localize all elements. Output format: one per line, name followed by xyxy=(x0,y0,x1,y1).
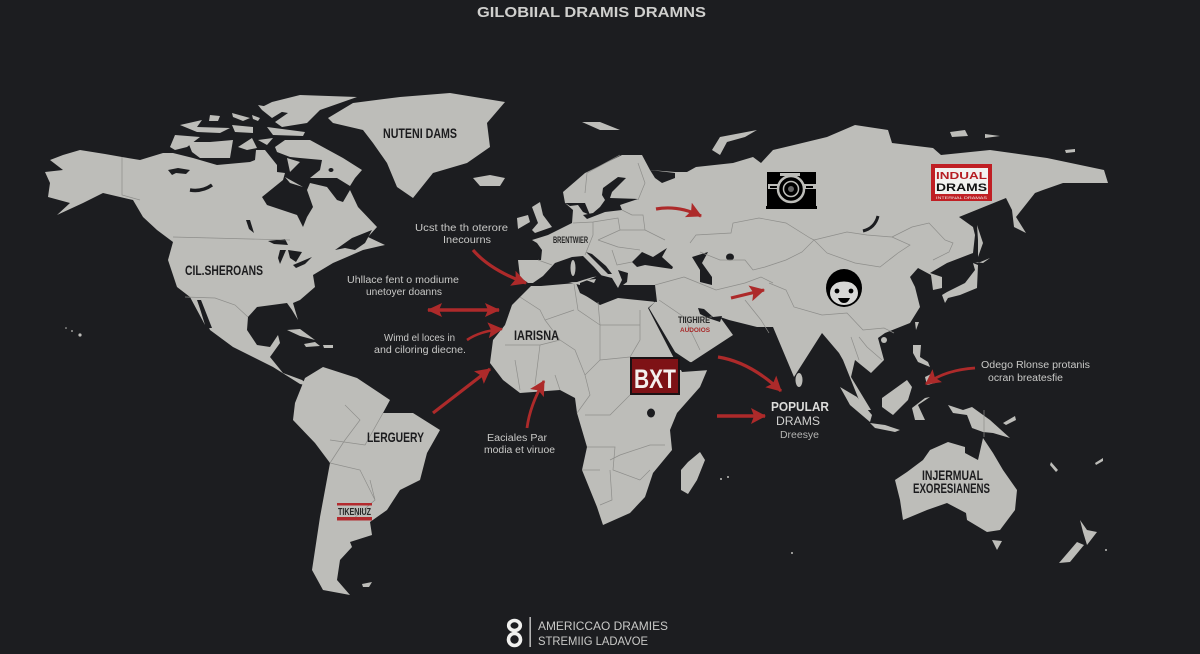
callout: popular dramas xyxy=(771,399,830,441)
Great Lakes xyxy=(268,239,312,268)
world map xyxy=(45,93,1108,595)
map label: Africa: IARISNA xyxy=(514,327,559,343)
Foxe Basin spot xyxy=(328,168,334,172)
Great Slave Lake xyxy=(190,185,212,190)
small logo: Arabia: AUDOIOS xyxy=(680,328,710,334)
map label: Greenland: NUTENI DAMS xyxy=(383,125,457,141)
callout: Atlantic middle xyxy=(347,275,459,298)
title: GILOBIIAL DRAMIS DRAMNS xyxy=(477,4,706,21)
arrow: into Russia xyxy=(656,208,701,216)
arrow: to West Africa xyxy=(467,329,502,340)
Australia xyxy=(895,438,1017,532)
arrow: to popular dramas xyxy=(717,414,765,418)
callout: Gulf of Guinea: modia et viruoe xyxy=(484,445,555,456)
Novaya Zemlya xyxy=(712,130,757,155)
Africa xyxy=(490,283,708,525)
map label: North America: CIL.SHEROANS xyxy=(185,262,263,278)
Skagerrak xyxy=(565,203,590,215)
Red Sea and Gulf of Aden xyxy=(648,306,710,372)
small logo: South America xyxy=(337,503,372,520)
Aral Sea xyxy=(726,254,734,260)
red arrows xyxy=(428,208,975,428)
callout: Atlantic middle: unetoyer doanns xyxy=(366,287,442,298)
callout: Atlantic top xyxy=(415,223,508,246)
callout: Pacific: ocran breatesfie xyxy=(988,373,1063,384)
arrow: into Afghanistan xyxy=(731,290,764,298)
small logo: Arabia xyxy=(678,315,710,334)
small logo: Arabia: TIIGHIRE xyxy=(678,315,710,325)
Caspian Sea xyxy=(692,252,712,285)
footer text xyxy=(538,619,668,648)
Madagascar xyxy=(681,452,705,494)
Lake Baikal xyxy=(863,216,878,231)
map label: Australia xyxy=(913,467,990,496)
footer logo xyxy=(508,620,520,646)
Caribbean islands xyxy=(287,329,333,348)
Eurasia xyxy=(518,125,1108,410)
badge: Indual Drams: INDUAL xyxy=(936,171,987,182)
New Zealand xyxy=(1059,520,1097,563)
country borders xyxy=(122,155,984,520)
callout: Gulf of Guinea xyxy=(484,433,555,456)
callout: Atlantic top: Ucst the th oterore xyxy=(415,223,508,234)
map label: South America: LERGUERY xyxy=(367,429,424,445)
Black Sea xyxy=(632,248,673,269)
callout: Atlantic lower: Wimd el loces in xyxy=(384,333,455,344)
callout: popular dramas: POPULAR xyxy=(771,399,830,414)
arrow: Atlantic to Iberia xyxy=(473,250,526,283)
Mediterranean islands xyxy=(570,260,596,283)
callout: popular dramas: Dreesye xyxy=(780,430,819,441)
map label: Australia: INJERMUAL xyxy=(922,467,983,483)
arrow: Brazil to West Africa xyxy=(433,369,490,413)
small logo: South America: TIKENIUZ xyxy=(338,507,371,518)
footer text: STREMIIG LADAVOE xyxy=(538,634,648,648)
map label: Australia: EXORESIANENS xyxy=(913,480,990,496)
Adriatic Sea xyxy=(586,252,612,274)
seas and lakes xyxy=(168,168,878,418)
North America xyxy=(45,150,385,386)
Southeast Asia islands xyxy=(796,337,1016,438)
Lake Winnipeg xyxy=(246,220,254,233)
Gulf of St Lawrence xyxy=(335,230,372,250)
icon: camera xyxy=(766,172,817,209)
arrow: Arabia to Indian Ocean xyxy=(718,357,781,391)
badge: BXT xyxy=(630,357,680,395)
White Sea xyxy=(650,170,675,183)
South America xyxy=(293,367,440,595)
callout: Pacific: Odego Rlonse protanis xyxy=(981,360,1090,371)
footer divider xyxy=(530,617,531,647)
Gulf of California xyxy=(197,300,212,328)
Greenland xyxy=(328,93,505,198)
arrow: double-headed Atlantic xyxy=(428,308,499,312)
northern islands xyxy=(582,122,1075,153)
western Mediterranean xyxy=(530,256,602,285)
eastern Mediterranean xyxy=(580,270,657,305)
footer text: AMERICCAO DRAMIES xyxy=(538,619,668,633)
Great Bear Lake xyxy=(168,168,190,175)
icon: face xyxy=(826,269,862,307)
Japan and Sakhalin xyxy=(915,225,990,330)
badge: Indual Drams: INTERNAL DRAMAS xyxy=(936,195,987,200)
badge: BXT: BXT xyxy=(634,364,676,394)
Baltic Sea xyxy=(583,177,638,219)
British Isles xyxy=(517,202,552,233)
callout: popular dramas: DRAMS xyxy=(776,414,820,428)
callout: Gulf of Guinea: Eaciales Par xyxy=(487,433,548,444)
Arctic islands xyxy=(170,95,362,187)
small ocean islands xyxy=(65,327,1107,554)
callout: Atlantic lower xyxy=(374,333,466,356)
badge: Indual Drams xyxy=(931,164,992,201)
callout: Pacific xyxy=(981,360,1090,384)
badge: Indual Drams: DRAMS xyxy=(936,182,987,194)
Persian Gulf xyxy=(698,308,722,322)
Tasmania xyxy=(992,540,1002,550)
Lake Victoria xyxy=(647,408,655,418)
arrow: to Philippines xyxy=(926,368,975,384)
callout: Atlantic middle: Uhllace fent o modiume xyxy=(347,275,459,286)
callout: Atlantic top: Inecourns xyxy=(443,235,491,246)
small logo: Europe: BRENTWIER xyxy=(553,235,588,245)
arrow: Guinea to Nigeria xyxy=(527,381,544,428)
callout: Atlantic lower: and ciloring diecne. xyxy=(374,345,466,356)
Iceland xyxy=(473,175,505,186)
